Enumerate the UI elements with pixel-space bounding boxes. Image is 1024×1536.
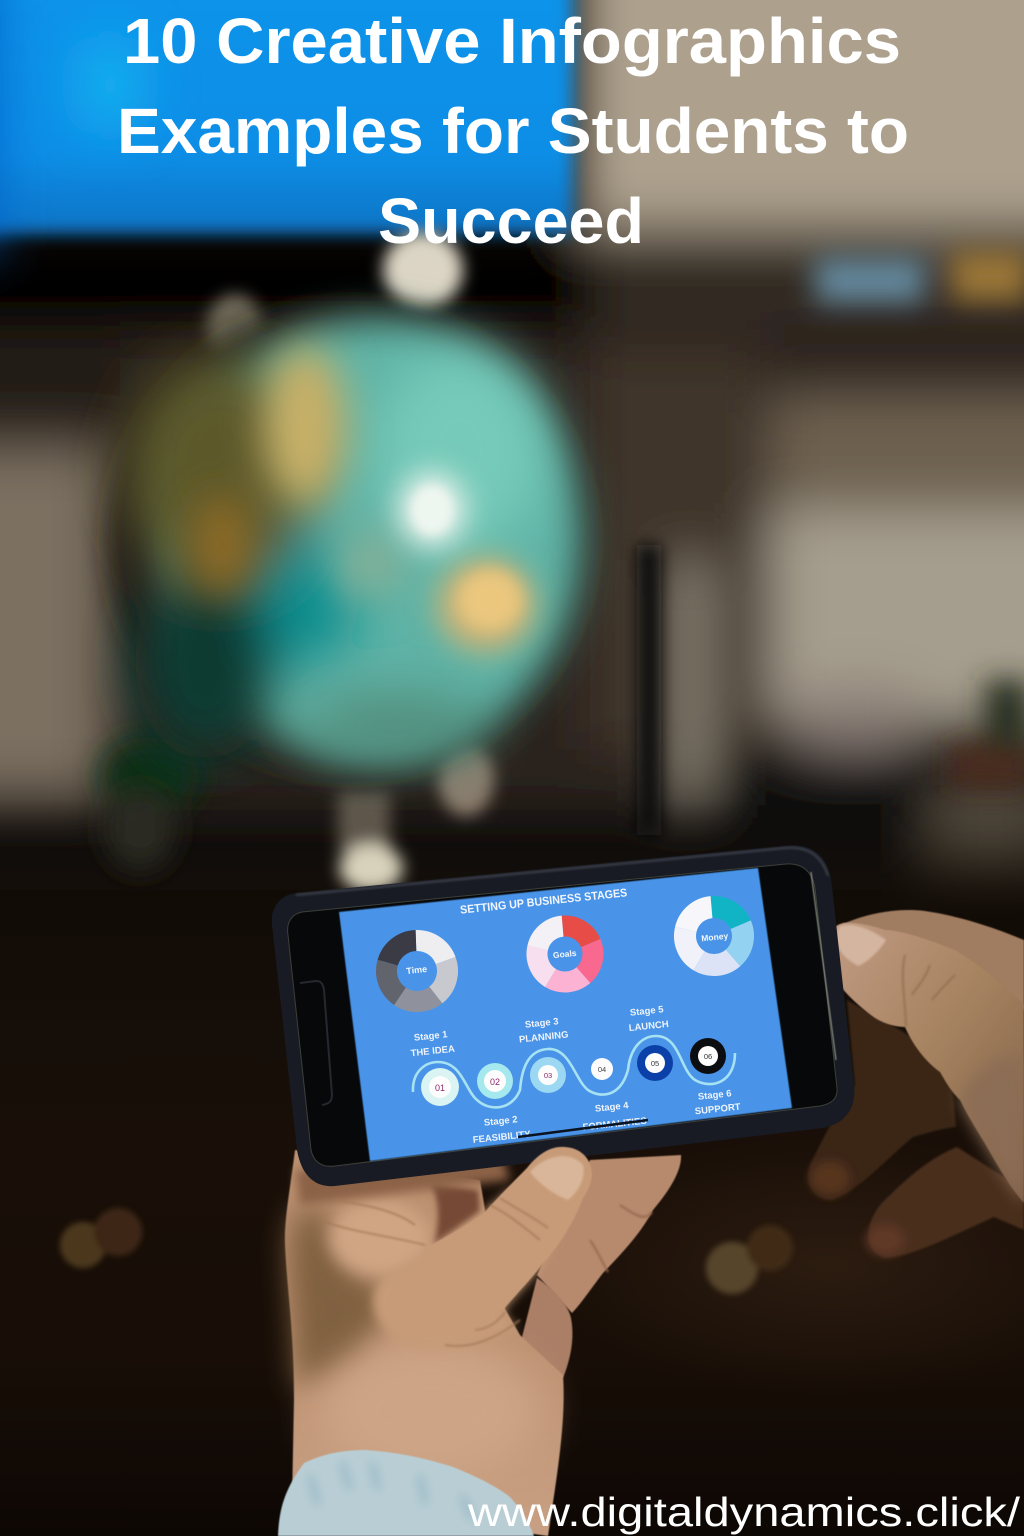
stage labels: FORMALITIES bbox=[582, 1116, 647, 1133]
donut: time: Time bbox=[406, 964, 428, 976]
step 05: 05 bbox=[651, 1059, 659, 1068]
screen title: SETTING UP BUSINESS STAGES bbox=[460, 887, 628, 917]
stage labels: Stage 4 bbox=[594, 1100, 630, 1115]
right hand bbox=[808, 910, 1024, 1258]
bokeh highlights bbox=[207, 232, 494, 892]
blue screen in background bbox=[0, 0, 573, 234]
title: Succeed bbox=[378, 185, 644, 257]
donut: goals bbox=[525, 914, 605, 994]
thumb knuckle creases bbox=[490, 1198, 548, 1240]
step 03: 03 bbox=[544, 1071, 552, 1080]
globe bbox=[110, 305, 590, 775]
phone edge shadow bbox=[295, 1150, 510, 1205]
home indicator bbox=[518, 1120, 648, 1137]
step 01 bbox=[421, 1068, 459, 1106]
donut: money bbox=[673, 895, 755, 977]
lower hand shade bbox=[960, 1057, 1024, 1203]
phone case bbox=[272, 846, 854, 1186]
step 01: 01 bbox=[435, 1083, 445, 1093]
screen bbox=[339, 868, 792, 1161]
thumb bbox=[425, 1147, 592, 1310]
back finger bbox=[537, 1155, 681, 1313]
knuckle creases bbox=[903, 955, 955, 1027]
second finger bbox=[520, 1278, 572, 1378]
palm silhouette bbox=[285, 1150, 564, 1536]
webbing shadow bbox=[430, 1183, 480, 1246]
bokeh lights bbox=[60, 1208, 793, 1294]
glass edge line bbox=[811, 872, 836, 1060]
website url: www.digitaldynamics.click/ bbox=[467, 1489, 1021, 1535]
palm lit patch bbox=[330, 1200, 430, 1276]
stage labels: SUPPORT bbox=[694, 1102, 741, 1117]
donut: time bbox=[374, 928, 460, 1014]
stage labels bbox=[410, 1004, 741, 1146]
back finger bbox=[843, 910, 1024, 1010]
donut: money: Money bbox=[701, 931, 729, 943]
nail bbox=[837, 925, 886, 966]
lower palm glow bbox=[320, 1340, 540, 1480]
blue glow bbox=[0, 0, 142, 250]
donut: goals: Goals bbox=[552, 948, 577, 960]
stage labels: Stage 3 bbox=[524, 1016, 559, 1031]
stage labels: THE IDEA bbox=[410, 1044, 455, 1059]
left thumb over phone bbox=[425, 1147, 592, 1310]
left hand bbox=[285, 1150, 681, 1536]
lower fingers bbox=[808, 1000, 1024, 1258]
stage labels: Stage 6 bbox=[697, 1088, 732, 1103]
step 06: 06 bbox=[704, 1052, 712, 1061]
phone bbox=[272, 846, 854, 1186]
step 02: 02 bbox=[490, 1077, 500, 1087]
title: Examples for Students to bbox=[117, 95, 909, 167]
thumb nail bbox=[530, 1156, 584, 1200]
stage timeline wave bbox=[413, 1036, 735, 1107]
stage labels: FEASIBILITY bbox=[472, 1129, 532, 1146]
stage labels: PLANNING bbox=[518, 1029, 569, 1046]
palm crease bbox=[320, 1200, 520, 1346]
lamp pole bbox=[637, 545, 661, 835]
stage labels: Stage 2 bbox=[483, 1114, 518, 1129]
palm shadow bbox=[289, 1210, 395, 1390]
step 05 bbox=[637, 1045, 673, 1081]
blurred room objects bbox=[100, 680, 1024, 870]
step 03 bbox=[530, 1057, 566, 1093]
title bbox=[117, 5, 909, 257]
stage labels: LAUNCH bbox=[628, 1019, 669, 1034]
thumb base bbox=[373, 1190, 560, 1350]
sleeve bbox=[278, 1450, 534, 1536]
stage labels: Stage 1 bbox=[413, 1029, 449, 1044]
notch bbox=[300, 981, 332, 1105]
step 04 bbox=[591, 1058, 613, 1080]
step 04: 04 bbox=[598, 1065, 606, 1074]
stage labels: Stage 5 bbox=[629, 1004, 665, 1019]
step 02 bbox=[477, 1063, 513, 1099]
step 06 bbox=[690, 1038, 726, 1074]
thumb and back of hand bbox=[825, 923, 1024, 1203]
title: 10 Creative Infographics bbox=[123, 5, 901, 77]
phone glass bbox=[288, 864, 837, 1166]
blurred shelf objects bbox=[815, 250, 1024, 303]
case highlight bbox=[296, 848, 828, 895]
